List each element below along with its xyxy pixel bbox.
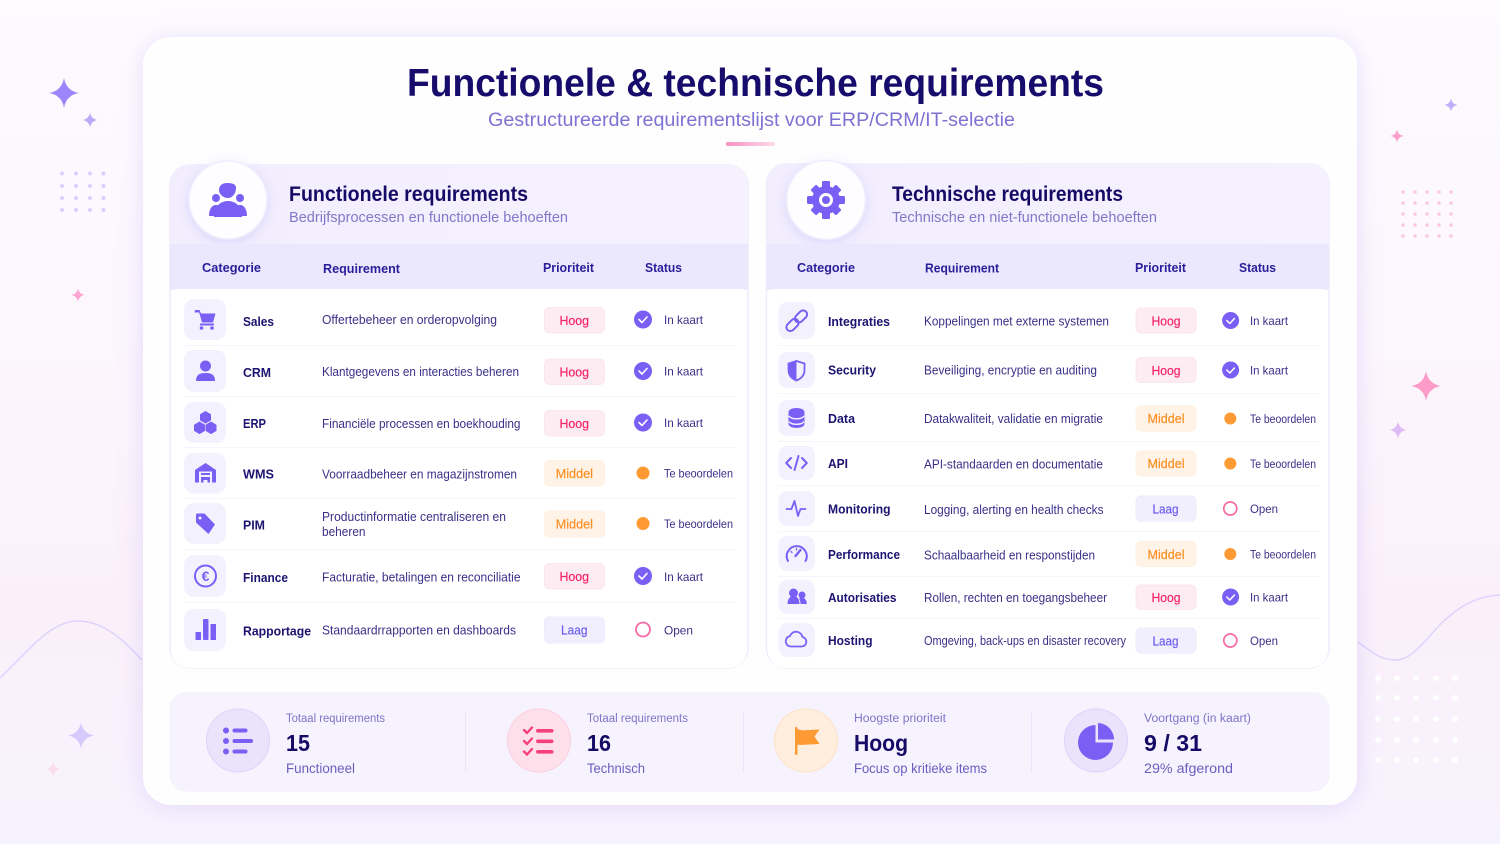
priority badge	[1136, 308, 1196, 333]
priority badge	[1136, 496, 1196, 521]
stat: functioneel	[206, 709, 385, 776]
status: Te beoordelen	[1250, 550, 1316, 562]
icon: list	[206, 709, 270, 772]
stat: functioneel: 15	[286, 730, 310, 756]
decoration: curved lines	[0, 595, 1500, 678]
row: ERP	[184, 402, 704, 443]
icon: pie chart	[1064, 709, 1128, 772]
icon: euro	[184, 555, 226, 597]
row: CRM	[184, 350, 704, 392]
row: Integraties: Koppelingen met externe systemen	[924, 314, 1109, 328]
panel background	[766, 164, 1329, 668]
status: Te beoordelen	[1250, 414, 1316, 426]
status	[1224, 458, 1316, 471]
panel header background	[766, 164, 1329, 244]
priority badge	[544, 617, 604, 643]
stat: functioneel: Totaal requirements	[286, 713, 385, 725]
priority badge: Laag	[1152, 502, 1178, 516]
priority badge	[544, 308, 604, 333]
status	[634, 310, 704, 328]
priority badge: Middel	[1148, 456, 1185, 471]
icon: link	[778, 302, 815, 339]
row: Finance: Facturatie, betalingen en reconciliatie	[322, 570, 521, 584]
row: ERP: ERP	[243, 416, 266, 431]
row: Autorisaties: Rollen, rechten en toegangsbeheer	[924, 591, 1107, 605]
decoration: left sparkles	[46, 78, 98, 776]
table header: Prioriteit	[1135, 260, 1187, 275]
row: Hosting: Hosting	[828, 633, 873, 648]
table header: Categorie	[797, 260, 855, 275]
priority badge: Hoog	[560, 313, 589, 328]
stat: hoogste prioriteit	[774, 709, 987, 776]
status	[634, 414, 704, 432]
priority badge: Laag	[561, 622, 588, 638]
table header: Status	[1239, 260, 1276, 275]
row: WMS: Voorraadbeheer en magazijnstromen	[322, 468, 517, 482]
row: WMS: WMS	[243, 466, 274, 482]
table header: Requirement	[925, 260, 1000, 276]
priority badge	[1136, 585, 1196, 610]
stat: voortgang: 9 / 31	[1144, 730, 1202, 756]
row: WMS	[184, 453, 733, 494]
row: Security	[778, 352, 1289, 388]
stat: technisch	[508, 709, 688, 776]
priority badge: Hoog	[1152, 363, 1180, 378]
table header: Requirement	[323, 261, 401, 276]
icon: pulse	[778, 491, 815, 526]
row: Integraties: Integraties	[828, 314, 890, 329]
decoration: bottom right white dot grid	[1375, 675, 1458, 763]
decoration: right dot grid	[1401, 190, 1453, 238]
summary bar	[170, 693, 1329, 791]
row: PIM	[184, 503, 733, 544]
row: Sales: Sales	[243, 314, 274, 329]
row: API: API	[828, 456, 848, 471]
status: In kaart	[664, 416, 704, 430]
row: Autorisaties	[778, 580, 1289, 614]
panel: technische requirements	[766, 160, 1329, 668]
stat: technisch: Totaal requirements	[587, 713, 688, 725]
panel subheading: Technische en niet-functionele behoeften	[892, 210, 1157, 226]
row: PIM: PIM	[243, 518, 265, 532]
priority badge: Hoog	[560, 416, 589, 431]
panel heading: Technische requirements	[892, 183, 1123, 206]
row: Data: Data	[828, 411, 856, 426]
decoration: right sparkles	[1390, 98, 1458, 438]
icon: database	[778, 400, 815, 436]
status	[634, 362, 704, 380]
stat: voortgang: 29% afgerond	[1144, 761, 1233, 776]
stat: technisch: 16	[587, 730, 611, 756]
row: Hosting: Omgeving, back-ups en disaster recovery	[924, 634, 1127, 648]
priority badge	[1136, 542, 1196, 566]
row: Sales	[184, 299, 704, 340]
icon: tag	[184, 503, 226, 544]
status: Open	[664, 624, 693, 638]
row: Data	[778, 400, 1316, 436]
priority badge	[1136, 451, 1196, 476]
priority badge: Hoog	[1152, 590, 1180, 605]
row: API: API-standaarden en documentatie	[924, 458, 1103, 472]
status	[1222, 312, 1289, 329]
table header: Categorie	[202, 260, 261, 275]
row: Monitoring: Logging, alerting en health checks	[924, 503, 1104, 517]
row: Performance: Schaalbaarheid en responstijden	[924, 548, 1095, 562]
icon: warehouse	[184, 453, 226, 494]
row: Rapportage: Standaardrrapporten en dashboards	[322, 624, 516, 638]
row: Autorisaties: Autorisaties	[828, 590, 896, 605]
panel: functionele requirements	[170, 161, 748, 668]
status: In kaart	[664, 364, 704, 378]
icon: hexagons	[184, 402, 226, 443]
status	[634, 567, 704, 585]
status: Te beoordelen	[664, 466, 733, 480]
status: Open	[1250, 502, 1278, 516]
status: In kaart	[1250, 364, 1289, 378]
status: Te beoordelen	[1250, 459, 1316, 471]
status: Te beoordelen	[664, 517, 733, 531]
priority badge: Middel	[1148, 547, 1185, 562]
row: ERP: Financiële processen en boekhouding	[322, 417, 521, 431]
table header	[170, 244, 748, 290]
priority badge: Middel	[556, 466, 593, 481]
icon: users	[778, 580, 815, 614]
row: Monitoring	[778, 491, 1278, 526]
row: API	[778, 446, 1316, 480]
stat: hoogste prioriteit: Hoogste prioriteit	[854, 713, 947, 725]
status: In kaart	[664, 570, 704, 584]
row: Rapportage	[184, 609, 693, 651]
row: Finance	[184, 555, 704, 597]
stat: voortgang	[1064, 709, 1251, 776]
priority badge: Middel	[1148, 411, 1185, 426]
stat: hoogste prioriteit: Focus op kritieke items	[854, 761, 987, 776]
requirement text: Productinformatie centraliseren en	[322, 510, 506, 524]
row: Performance: Performance	[828, 547, 900, 562]
title accent bar	[726, 142, 775, 146]
icon: cart	[184, 299, 226, 340]
row: Security: Beveiliging, encryptie en auditing	[924, 364, 1097, 378]
panel background	[170, 165, 748, 668]
status	[1224, 634, 1278, 648]
stat: voortgang: Voortgang (in kaart)	[1144, 713, 1251, 725]
priority badge	[1136, 406, 1196, 431]
status	[1222, 588, 1289, 606]
panel header background	[170, 165, 748, 244]
table header	[766, 244, 1329, 290]
icon: person	[184, 350, 226, 392]
summary background	[170, 693, 1329, 791]
requirement text: beheren	[322, 525, 366, 539]
icon: cloud	[778, 623, 815, 657]
priority badge	[544, 511, 604, 537]
row: Hosting	[778, 623, 1278, 657]
status: Open	[1250, 634, 1278, 648]
table body	[768, 289, 1328, 668]
priority badge	[544, 564, 604, 589]
status	[1222, 362, 1289, 378]
priority badge: Hoog	[560, 569, 589, 584]
row: Security: Security	[828, 362, 877, 378]
table body	[171, 289, 747, 668]
icon: bars	[184, 609, 226, 651]
icon: users	[189, 161, 267, 239]
priority badge	[1136, 358, 1196, 382]
status	[1224, 502, 1278, 516]
status	[1224, 548, 1316, 562]
row: CRM: Klantgegevens en interacties beheren	[322, 365, 519, 379]
priority badge	[1136, 628, 1196, 653]
status	[1224, 412, 1316, 426]
icon: shield	[778, 352, 815, 388]
row: Sales: Offertebeheer en orderopvolging	[322, 313, 497, 327]
row: Data: Datakwaliteit, validatie en migratie	[924, 412, 1103, 426]
table header: Status	[645, 260, 682, 275]
priority badge: Hoog	[1152, 314, 1180, 328]
subtitle: Gestructureerde requirementslijst voor ERP/CRM/IT-selectie	[488, 110, 1015, 131]
row: Rapportage: Rapportage	[243, 624, 311, 638]
status	[636, 517, 733, 531]
status	[636, 622, 693, 638]
icon: gear	[786, 160, 866, 240]
priority badge: Hoog	[560, 364, 589, 380]
decoration: left dot grid	[60, 172, 106, 212]
row: Finance: Finance	[243, 570, 288, 585]
row: CRM: CRM	[243, 365, 271, 380]
title: Functionele & technische requirements	[407, 62, 1104, 105]
table header: Prioriteit	[543, 260, 595, 275]
icon: checklist	[508, 709, 570, 772]
row: Integraties	[778, 302, 1289, 339]
row: Monitoring: Monitoring	[828, 502, 891, 516]
requirement text	[322, 510, 506, 539]
priority badge	[544, 359, 604, 384]
priority badge: Middel	[556, 516, 593, 532]
priority badge	[544, 460, 604, 486]
icon: gauge	[778, 536, 815, 571]
priority badge: Laag	[1152, 634, 1178, 648]
main card	[143, 37, 1357, 805]
icon: flag	[774, 709, 838, 772]
panel heading: Functionele requirements	[289, 183, 528, 206]
stat: hoogste prioriteit: Hoog	[854, 730, 908, 756]
status: In kaart	[1250, 314, 1289, 328]
status	[636, 466, 733, 480]
row: Performance	[778, 536, 1316, 571]
status: In kaart	[1250, 590, 1289, 604]
priority badge	[544, 410, 604, 436]
stat: functioneel: Functioneel	[286, 761, 355, 776]
status: In kaart	[664, 313, 704, 327]
panel subheading: Bedrijfsprocessen en functionele behoeften	[289, 210, 568, 226]
stat: technisch: Technisch	[587, 761, 645, 776]
icon: euro: €	[202, 568, 210, 584]
icon: code	[778, 446, 815, 480]
